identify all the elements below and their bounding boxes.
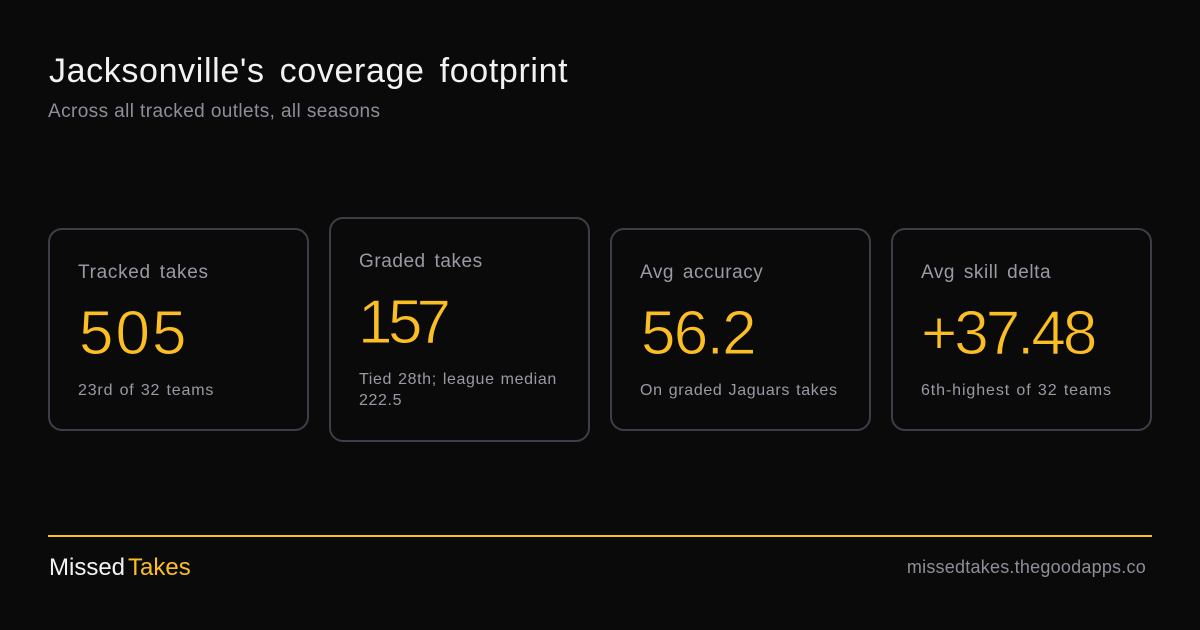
- panel: avg skill delta: [891, 228, 1152, 431]
- note: rank and median: Tied 28th; league median: [359, 371, 557, 388]
- value: 505: 505: [79, 299, 188, 368]
- panel: tracked takes: [48, 228, 309, 431]
- label: avg accuracy: Avg accuracy: [640, 262, 763, 283]
- label: avg skill delta: Avg skill delta: [921, 262, 1051, 283]
- note: rank and median: 222.5: [359, 392, 402, 409]
- panel: avg accuracy: [610, 228, 871, 431]
- value: +37.48: +37.48: [921, 299, 1094, 368]
- note: rank and median: [359, 371, 557, 409]
- value: 56.2: 56.2: [641, 299, 755, 368]
- panel: graded takes: [329, 217, 590, 442]
- label: graded takes: Graded takes: [359, 251, 483, 272]
- footer rule: [48, 535, 1152, 537]
- label: tracked takes: Tracked takes: [78, 262, 209, 283]
- note: scope: On graded Jaguars takes: [640, 382, 838, 399]
- value: 157: 157: [358, 288, 445, 357]
- brand wordmark: MissedTakes: [49, 554, 191, 581]
- footer url: missedtakes.thegoodapps.co: [907, 557, 1146, 577]
- note: rank: 6th-highest of 32 teams: [921, 382, 1112, 399]
- title: Jacksonville's coverage footprint: [49, 52, 568, 90]
- note: rank: 23rd of 32 teams: [78, 382, 214, 399]
- subtitle: Across all tracked outlets, all seasons: [48, 101, 380, 122]
